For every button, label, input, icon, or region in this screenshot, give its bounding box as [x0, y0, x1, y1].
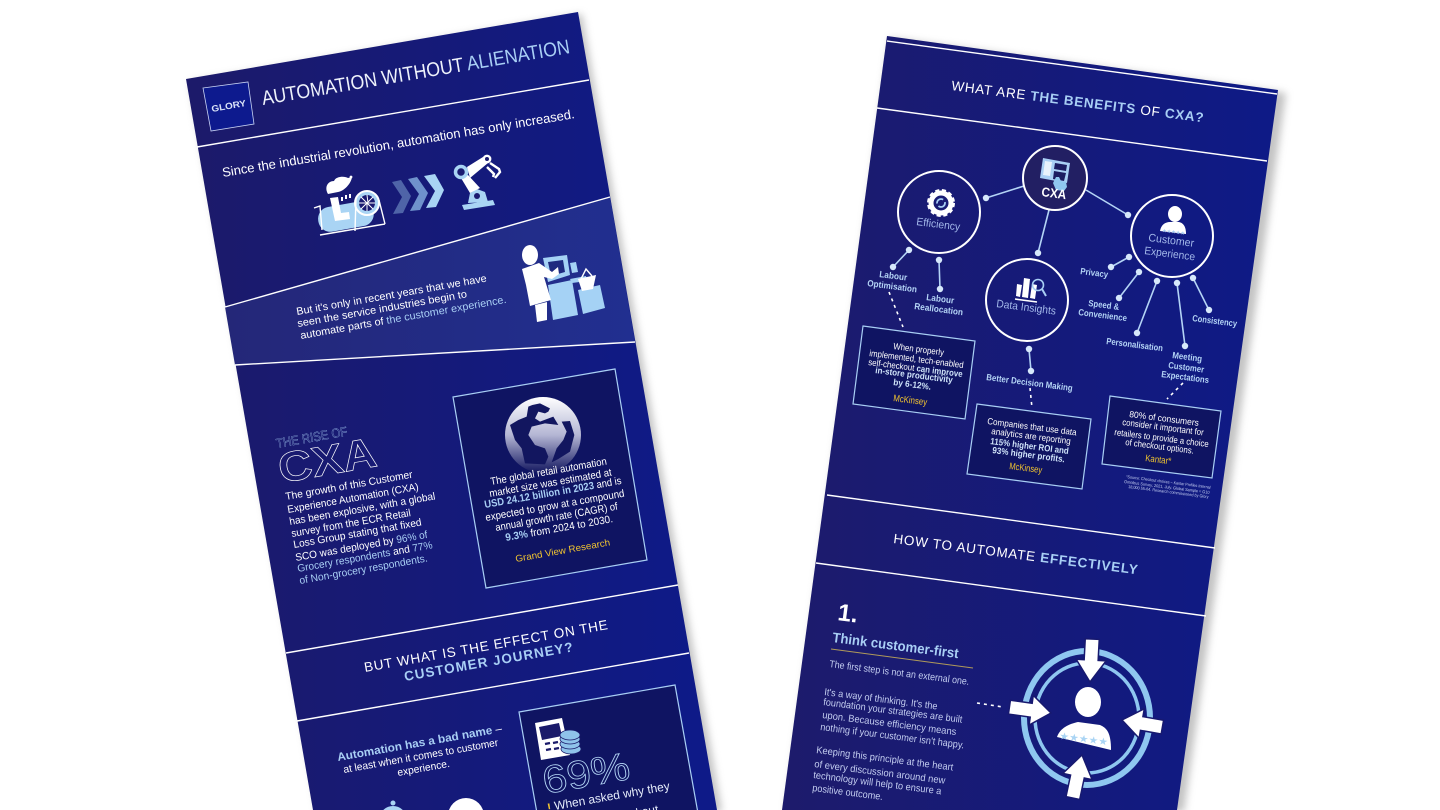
- callout: Kantar checkout options: of checkout options.: [1125, 437, 1194, 456]
- callout: McKinsey data analytics: 93% higher profits.: [992, 445, 1065, 464]
- labels: customer experience branches: Better Decision Making: [986, 372, 1073, 393]
- logo: GLORY: GLORY: [211, 98, 247, 114]
- icon: chevrons: [392, 174, 444, 214]
- callout: Kantar checkout options: consider it important for: [1122, 417, 1204, 437]
- node: CXA: CXA: [1041, 184, 1068, 202]
- labels: customer experience branches: Privacy: [1080, 266, 1109, 280]
- text: customer-first explanation: of every discussion around new: [814, 759, 947, 787]
- labels: customer experience branches: Personalisation: [1106, 336, 1164, 353]
- callout: McKinsey self-checkout: self-checkout can improve: [868, 357, 963, 379]
- footnote: [1124, 474, 1211, 499]
- labels: customer experience branches: Customer: [1168, 360, 1205, 375]
- callout: Kantar checkout options: retailers to provide a choice: [1114, 427, 1209, 449]
- footnote: *Source: Checkout choices – Kantar Profiles Internal: [1126, 474, 1211, 490]
- text: customer-first explanation: [812, 659, 970, 803]
- text: customer-first explanation: positive outcome.: [812, 783, 883, 803]
- callout: McKinsey self-checkout: by 6-12%.: [893, 377, 932, 392]
- title: AUTOMATION WITHOUT ALIENATION: [260, 36, 571, 110]
- connectors: benefit tree: [890, 186, 1212, 374]
- footnote: 18,000 55-64. Research commissioned by Glory: [1128, 484, 1210, 499]
- text: growth of CXA: of Non-grocery respondents.: [298, 553, 429, 587]
- callout: McKinsey self-checkout: When properly: [893, 341, 945, 358]
- text: customer-first explanation: technology will help to ensure a: [813, 770, 942, 797]
- icon: globe: [505, 397, 581, 473]
- callout: McKinsey data analytics: Companies that use data: [987, 416, 1077, 437]
- callout: McKinsey data analytics: analytics are reporting: [991, 426, 1071, 446]
- step number: 1.: [836, 599, 860, 628]
- icon: robot head: [380, 800, 406, 810]
- node: customer experience: Customer: [1148, 232, 1195, 250]
- node: efficiency: [898, 171, 980, 253]
- callout: Kantar checkout options: 80% of consumers: [1129, 409, 1200, 428]
- text: growth of CXA: SCO was deployed by 96% of: [294, 529, 429, 564]
- text: automation has a bad name: at least when it comes to customer: [342, 737, 500, 776]
- callout: McKinsey self-checkout: McKinsey: [893, 393, 928, 408]
- callout: 69% stat: [519, 685, 701, 810]
- callout: global retail automation market: 9.3% from 2024 to 2030.: [504, 513, 614, 544]
- icon: calculator and coins: [535, 718, 581, 760]
- icon: customer with stars: ★★★★★: [1162, 228, 1186, 237]
- text: customer-first explanation: The first step is not an external one.: [829, 659, 970, 688]
- icon: customer target with arrows: [1007, 638, 1165, 801]
- text: automation has a bad name: experience.: [396, 758, 451, 779]
- text: service industries: [295, 273, 507, 342]
- labels: efficiency branches: Optimisation: [867, 278, 918, 294]
- panel shadow right: [786, 38, 1286, 810]
- section band: service industries: [225, 197, 635, 365]
- text: growth of CXA: [284, 469, 436, 587]
- dashed leaders: [889, 292, 1183, 707]
- panel background right: [782, 36, 1278, 810]
- callout: global retail automation market: market size was estimated at: [488, 467, 613, 500]
- node: data insights: [986, 259, 1068, 341]
- labels: efficiency branches: Reallocation: [914, 301, 964, 317]
- heading: effect on customer journey: BUT WHAT IS THE EFFECT ON THE: [363, 617, 609, 675]
- callout: Kantar checkout options: [1102, 396, 1221, 478]
- labels: customer experience branches: Expectations: [1161, 369, 1210, 385]
- callout: global retail automation market: expected to grow at a compound: [484, 488, 626, 524]
- heading: the rise of: THE RISE OF: [275, 424, 348, 451]
- callout: global retail automation market: USD 24.12 billion in 2023 and is: [483, 475, 622, 511]
- labels: efficiency branches: Labour: [879, 269, 908, 283]
- callout: McKinsey data analytics: [967, 404, 1091, 489]
- labels: efficiency branches: [867, 269, 964, 317]
- icon: robot arm: [456, 156, 500, 210]
- text: customer-first explanation: foundation your strategies are built: [823, 697, 963, 726]
- labels: customer experience branches: Consistency: [1192, 313, 1238, 329]
- icon: touch screen: [1040, 158, 1070, 191]
- callout: Kantar checkout options: Kantar*: [1145, 453, 1172, 467]
- heading: benefits of CXA: WHAT ARE THE BENEFITS OF CXA?: [951, 78, 1204, 125]
- footnote: Omnibus Survey, 2021, July. Global Sample = G10: [1124, 479, 1210, 495]
- labels: customer experience branches: Convenience: [1078, 307, 1128, 323]
- node: efficiency: Efficiency: [916, 216, 961, 234]
- node: CXA: [1023, 146, 1087, 210]
- icon: bars and magnifier: [1015, 278, 1046, 302]
- labels: customer experience branches: Speed &: [1088, 298, 1120, 312]
- panel: left infographic sheet: [186, 12, 722, 810]
- text: customer-first explanation: upon. Because efficiency means: [822, 710, 957, 738]
- callout: global retail automation market: The global retail automation: [489, 456, 608, 488]
- callout: McKinsey self-checkout: implemented, tech-enabled: [869, 348, 964, 370]
- logo: GLORY: [203, 82, 254, 131]
- heading: how to automate effectively: HOW TO AUTOMATE EFFECTIVELY: [893, 531, 1139, 577]
- text: service industries: But it's only in recent years that we have: [295, 273, 488, 318]
- text: industrial revolution intro: Since the industrial revolution, automation has only increased.: [221, 106, 576, 180]
- text: growth of CXA: Grocery respondents and 77%: [296, 539, 433, 575]
- text: automation has a bad name: Automation has a bad name –: [336, 723, 504, 764]
- text: service industries: automate parts of the customer experience.: [299, 294, 507, 342]
- panel background left: [186, 12, 717, 810]
- callout: global retail automation market: annual growth rate (CAGR) of: [494, 501, 619, 534]
- heading: think customer-first: Think customer-first: [832, 629, 960, 661]
- callout: McKinsey data analytics: McKinsey: [1009, 461, 1043, 476]
- heading: CXA outlined: CXA: [274, 428, 380, 492]
- text: growth of CXA: Experience Automation (CXA): [286, 481, 420, 516]
- heading: effect on customer journey: CUSTOMER JOURNEY?: [403, 639, 574, 684]
- icon: person at self-checkout kiosk: [522, 245, 605, 322]
- text: growth of CXA: The growth of this Customer: [284, 469, 414, 503]
- text: customer-first explanation: It's a way of thinking. It's the: [824, 687, 938, 713]
- text: service industries: seen the service industries begin to: [296, 288, 468, 330]
- icon: gear: [928, 190, 954, 216]
- labels: customer experience branches: Meeting: [1172, 350, 1203, 364]
- stat: 69%: 69%: [539, 745, 633, 803]
- node: data insights: Data Insights: [996, 298, 1057, 318]
- callout: global retail automation market: Grand View Research: [515, 537, 611, 565]
- panel shadow left: [190, 14, 722, 810]
- panel: right infographic sheet: [782, 36, 1286, 810]
- icon: customer target with arrows: ★★★★★: [1059, 731, 1109, 748]
- node: customer experience: Experience: [1144, 245, 1196, 263]
- text: growth of CXA: survey from the ECR Retail: [290, 507, 412, 540]
- node: customer experience: [1131, 195, 1213, 277]
- text: customer-first explanation: Keeping this principle at the heart: [816, 745, 954, 774]
- text: growth of CXA: has been explosive, with a global: [288, 490, 436, 528]
- text: growth of CXA: Loss Group stating that fixed: [292, 517, 423, 551]
- callout: McKinsey self-checkout: [853, 326, 975, 419]
- callout: McKinsey data analytics: 115% higher ROI and: [990, 436, 1069, 456]
- text: customer-first explanation: nothing if your customer isn't happy.: [820, 722, 965, 751]
- callout: McKinsey self-checkout: in-store productivity: [875, 365, 953, 385]
- icon: steam engine: [314, 176, 385, 235]
- icon: customer head: [448, 798, 484, 810]
- labels: customer experience branches: [986, 266, 1238, 393]
- labels: efficiency branches: Labour: [926, 292, 955, 306]
- callout: global retail automation market: [453, 369, 647, 588]
